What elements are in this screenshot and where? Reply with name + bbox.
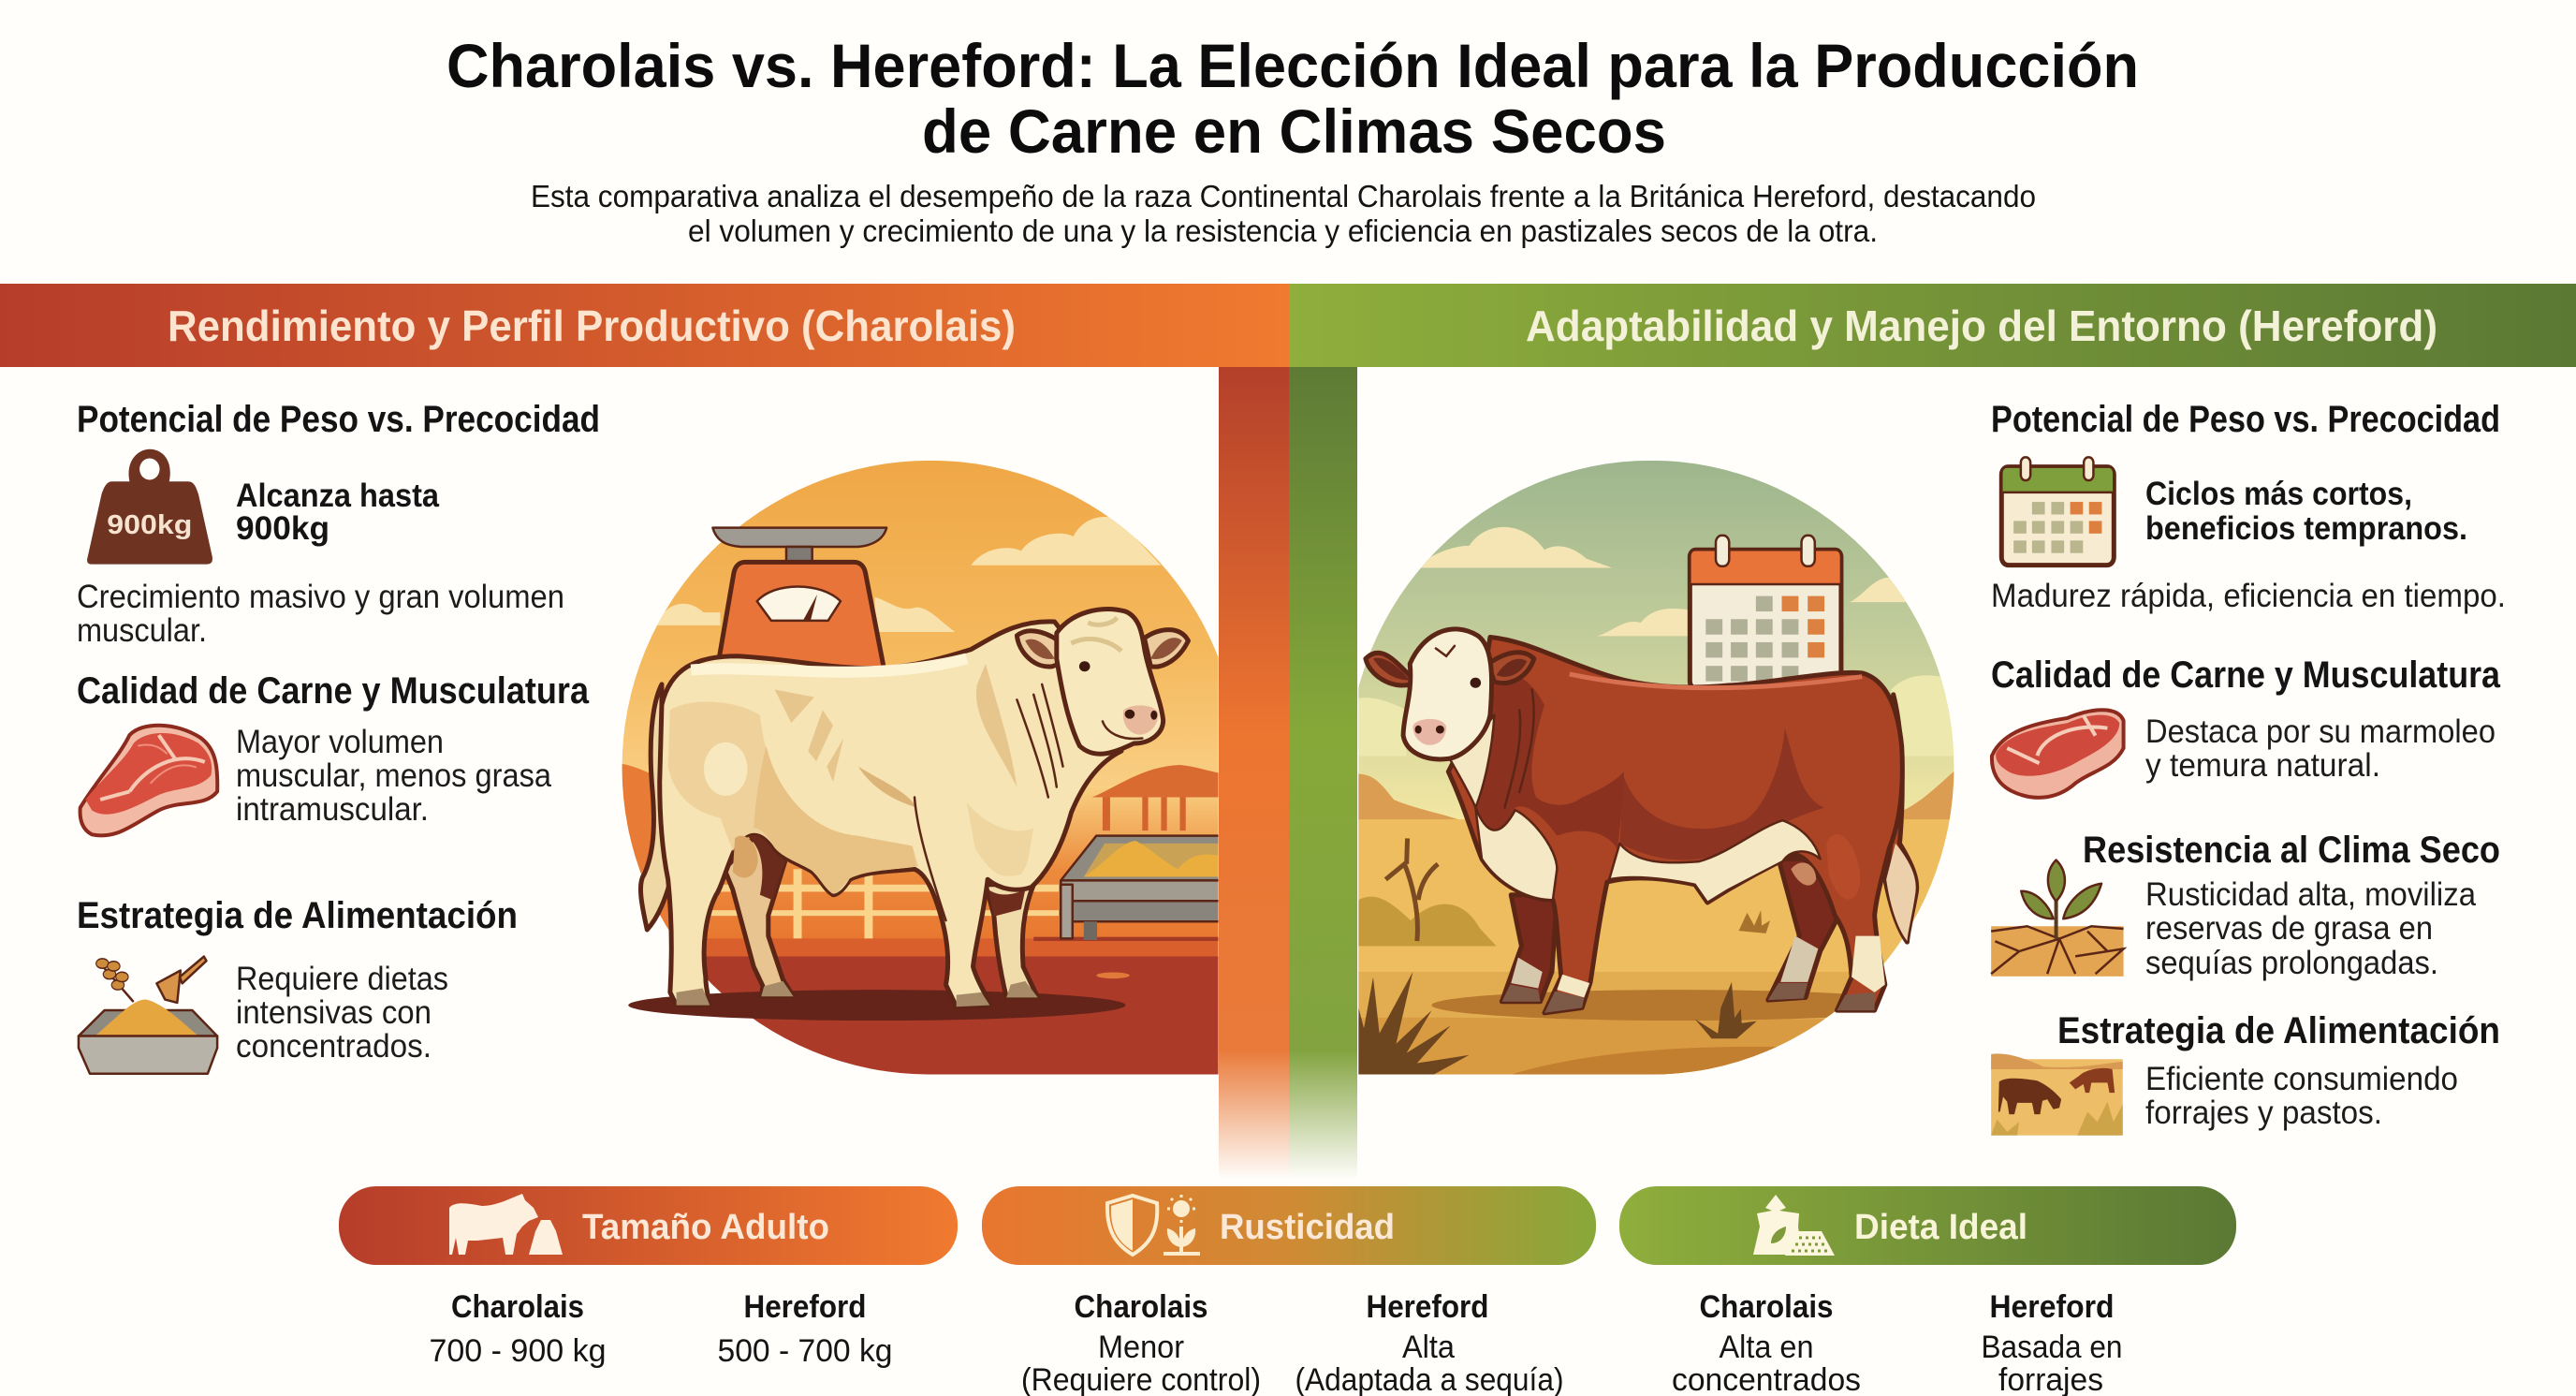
pill: Dieta Ideal [1619,1186,2236,1265]
text: requiere dietas: Requiere dietas [236,961,448,997]
bull far legs [724,832,1038,997]
icon: feed sack [1753,1195,1835,1256]
table: Rusticidad [1021,1289,1563,1396]
table: Rusticidad: Alta [1402,1330,1455,1365]
pill: Rusticidad: Rusticidad [1220,1208,1395,1247]
icon: weight 900kg: 900kg [107,510,192,540]
text: destaca: y temura natural. [2145,747,2380,784]
text: mayor volumen: intramuscular. [236,791,429,828]
table: Tamaño Adulto [429,1289,893,1369]
table: Rusticidad: Charolais [1075,1289,1208,1325]
icon: plant in cracked soil [1991,860,2124,977]
table: Tamaño Adulto: Hereford [743,1289,867,1325]
heading: resistencia: Resistencia al Clima Seco [2083,830,2500,871]
text: requiere dietas: concentrados. [236,1028,432,1065]
heading: estrategia: Estrategia de Alimentación [2057,1010,2500,1051]
text: ciclos: beneficios tempranos. [2145,510,2467,547]
text: destaca: Destaca por su marmoleo [2145,713,2496,750]
intro text: el volumen y crecimiento de una y la resistencia y eficiencia en pastizales secos de la otra. [688,213,1878,248]
table: Dieta Ideal: Basada en [1981,1330,2123,1365]
text: alcanza hasta [236,478,439,547]
heading: estrategia: Estrategia de Alimentación [77,895,518,936]
bull far legs [1501,859,1839,1002]
icon: shield and sun plant [1107,1195,1200,1255]
bull body [1448,637,1902,1013]
title: de Carne en Climas Secos [922,96,1666,166]
icon: scale [712,528,886,669]
illustration: Charolais bull with scale and feeder [599,459,1226,1080]
banner: Charolais: Rendimiento y Perfil Productivo (Charolais) [168,301,1016,350]
bull tail [1885,695,1917,942]
panel: Hereford attributes [1991,399,2506,1136]
icon: feed trough [1061,836,1222,940]
text: rusticidad: Rusticidad alta, moviliza [2145,876,2476,913]
heading: peso: Potencial de Peso vs. Precocidad [77,399,600,440]
banner: Charolais [0,284,1289,367]
text: crecimiento: Crecimiento masivo y gran volumen [77,579,564,615]
bull body [660,622,1125,1007]
text: crecimiento [77,579,564,649]
pill: Dieta Ideal: Dieta Ideal [1854,1208,2027,1247]
text: ciclos: Ciclos más cortos, [2145,476,2412,512]
text: crecimiento: muscular. [77,612,207,649]
table: Tamaño Adulto: 500 - 700 kg [717,1333,893,1369]
title: Charolais vs. Hereford: La Elección Ideal para la Producción [446,31,2139,100]
heading: calidad: Calidad de Carne y Musculatura [77,670,590,712]
text: eficiente: Eficiente consumiendo [2145,1061,2458,1097]
icon: feed tray [79,957,217,1074]
banner: Hereford [1289,284,2576,367]
intro text [531,179,2036,248]
icon: cow and weight [449,1194,563,1255]
bull head [1366,629,1534,808]
heading: peso: Potencial de Peso vs. Precocidad [1991,399,2500,440]
text: mayor volumen: muscular, menos grasa [236,757,551,794]
text: mayor volumen: Mayor volumen [236,724,444,760]
pill: Tamaño Adulto: Tamaño Adulto [582,1208,829,1247]
bull head [1017,610,1188,754]
table: Rusticidad: Menor [1098,1330,1184,1365]
icon: calendar [1690,536,1841,688]
table: Rusticidad: Hereford [1367,1289,1488,1325]
banner: Hereford: Adaptabilidad y Manejo del Entorno (Hereford) [1526,301,2437,350]
icon: green calendar [2001,457,2114,566]
text: ciclos [2145,476,2467,547]
text: eficiente: forrajes y pastos. [2145,1095,2382,1131]
text: alcanza hasta: 900kg [236,510,329,547]
pill: Tamaño Adulto [339,1186,958,1265]
panel: Charolais attributes [77,399,600,1074]
text: rusticidad: reservas de grasa en [2145,910,2433,947]
table: Dieta Ideal [1672,1289,2123,1396]
table: Dieta Ideal: Hereford [1990,1289,2114,1325]
icon: steak [80,726,217,835]
text: eficiente [2145,1061,2458,1131]
intro text: Esta comparativa analiza el desempeño de la raza Continental Charolais frente a la Británica Hereford, destacando [531,179,2036,213]
table: Tamaño Adulto: 700 - 900 kg [429,1333,607,1369]
icon: marbled steak [1992,710,2124,798]
icon: weight 900kg [87,449,212,565]
text: alcanza hasta: Alcanza hasta [236,478,439,514]
title [446,31,2139,166]
illustration: Hereford bull with calendar and dry pasture [1358,461,1954,1075]
text: mayor volumen [236,724,551,828]
heading: calidad: Calidad de Carne y Musculatura [1991,654,2501,696]
central divider bar [1219,367,1357,1180]
text: requiere dietas: intensivas con [236,994,432,1031]
text: rusticidad [2145,876,2476,981]
table: Dieta Ideal: Alta en [1719,1330,1814,1365]
text: destaca [2145,713,2496,784]
icon: cows grazing [1991,1053,2123,1136]
table: Tamaño Adulto: Charolais [451,1289,584,1325]
text: rusticidad: sequías prolongadas. [2145,945,2438,981]
bull shadow [628,990,1125,1021]
text: requiere dietas [236,961,448,1065]
table: Dieta Ideal: Charolais [1700,1289,1833,1325]
text: madurez: Madurez rápida, eficiencia en tiempo. [1991,578,2506,614]
pill: Rusticidad [982,1186,1596,1265]
bull tail [640,684,675,930]
